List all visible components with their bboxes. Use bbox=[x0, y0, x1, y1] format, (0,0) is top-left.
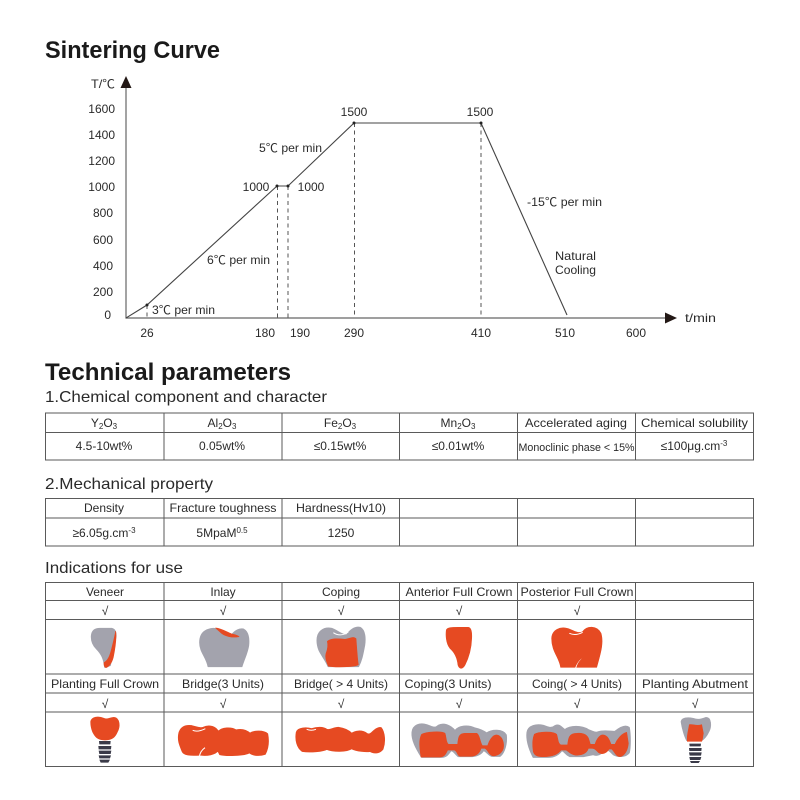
table: chemical component: Chemical solubility bbox=[641, 416, 748, 430]
row labels: Coping bbox=[322, 585, 360, 599]
heading: indications for use: Indications for use bbox=[45, 560, 183, 577]
x axis labels bbox=[140, 311, 716, 340]
x axis labels: 180 bbox=[255, 326, 275, 340]
row labels: Planting Abutment bbox=[642, 677, 749, 691]
table: chemical component bbox=[45, 413, 754, 460]
curve annotations: 5℃ per min bbox=[259, 141, 322, 155]
row labels: Bridge(3 Units) bbox=[182, 677, 264, 691]
row labels: Planting Full Crown bbox=[51, 677, 159, 691]
curve annotations: 1000 bbox=[298, 180, 325, 194]
table: mechanical property bbox=[45, 498, 754, 546]
y axis labels: 1400 bbox=[88, 128, 115, 142]
table: chemical component: O bbox=[342, 416, 352, 430]
row labels: √ bbox=[338, 604, 345, 618]
y axis labels: 1000 bbox=[88, 180, 115, 194]
row labels: √ bbox=[102, 697, 109, 711]
x axis labels: 290 bbox=[344, 326, 364, 340]
row labels: Inlay bbox=[210, 585, 236, 599]
table: mechanical property: 5MpaM bbox=[196, 526, 236, 540]
y axis labels: T/℃ bbox=[91, 77, 115, 91]
table: chemical component: Al bbox=[208, 416, 218, 430]
table: chemical component: O bbox=[462, 416, 471, 430]
row labels: √ bbox=[220, 697, 227, 711]
curve annotations: 3℃ per min bbox=[152, 303, 215, 317]
y axis labels: 1200 bbox=[88, 154, 115, 168]
temperature curve bbox=[126, 122, 567, 318]
row labels: Veneer bbox=[86, 585, 124, 599]
row labels: √ bbox=[456, 604, 463, 618]
table: chemical component: 2 bbox=[338, 422, 343, 431]
y axis labels: 800 bbox=[93, 206, 113, 220]
table: mechanical property: 0.5 bbox=[236, 526, 248, 535]
guide lines bbox=[147, 123, 481, 318]
curve annotations: 1000 bbox=[243, 180, 270, 194]
table: indications for use bbox=[45, 582, 754, 767]
icon: posterior crown bbox=[552, 627, 602, 667]
table: chemical component: Y bbox=[91, 416, 99, 430]
curve annotations bbox=[152, 105, 602, 317]
table: mechanical property: Hardness(Hv10) bbox=[296, 501, 386, 515]
y axis labels: 200 bbox=[93, 285, 113, 299]
table: mechanical property: ≥6.05g.cm bbox=[72, 526, 128, 540]
axes bbox=[120, 76, 677, 324]
y axis labels: 1600 bbox=[88, 102, 115, 116]
table: chemical component: 4.5-10wt% bbox=[76, 439, 133, 453]
icon: bridge 4 units bbox=[296, 728, 384, 753]
table: chemical component: O bbox=[103, 416, 113, 430]
table: chemical component: Fe bbox=[324, 416, 338, 430]
curve annotations: -15℃ per min bbox=[527, 195, 602, 209]
table: chemical component: Accelerated aging bbox=[525, 416, 627, 430]
x axis labels: 26 bbox=[140, 326, 154, 340]
x axis labels: 190 bbox=[290, 326, 310, 340]
icon: anterior crown bbox=[446, 627, 472, 668]
table: chemical component: 3 bbox=[232, 422, 237, 431]
icon: inlay tooth bbox=[200, 628, 249, 666]
row labels: √ bbox=[574, 604, 581, 618]
curve annotations: Cooling bbox=[555, 263, 596, 277]
icon: planting abutment bbox=[681, 717, 711, 763]
table: chemical component: 2 bbox=[218, 422, 223, 431]
curve annotations: 1500 bbox=[467, 105, 494, 119]
line chart: sintering curve bbox=[88, 76, 716, 340]
table: chemical component: Monoclinic phase < 15% bbox=[518, 442, 635, 454]
table: chemical component: -3 bbox=[720, 439, 728, 448]
heading: mechanical property: 2.Mechanical property bbox=[45, 476, 213, 493]
table: mechanical property: Density bbox=[84, 501, 124, 515]
icon: coping 3 units bbox=[412, 724, 506, 757]
x axis labels: 510 bbox=[555, 326, 575, 340]
icon: veneer tooth bbox=[92, 629, 116, 668]
table: chemical component: O bbox=[223, 416, 232, 430]
icon: coping 4 units bbox=[527, 725, 630, 757]
y axis labels bbox=[88, 77, 115, 322]
icon: bridge 3 units bbox=[179, 726, 268, 757]
icon: coping tooth bbox=[317, 628, 365, 667]
row labels: √ bbox=[574, 697, 581, 711]
table: mechanical property: Fracture toughness bbox=[170, 501, 276, 515]
icon: planting full crown bbox=[91, 717, 119, 763]
row labels: Coing( > 4 Units) bbox=[532, 677, 622, 691]
row labels: √ bbox=[692, 697, 699, 711]
table: chemical component: 2 bbox=[457, 422, 462, 431]
heading: Technical parameters: Technical parameters bbox=[45, 359, 291, 386]
row labels bbox=[51, 585, 749, 711]
y axis labels: 0 bbox=[104, 308, 111, 322]
row labels: √ bbox=[220, 604, 227, 618]
row labels: Posterior Full Crown bbox=[520, 585, 634, 599]
row labels: √ bbox=[456, 697, 463, 711]
table: chemical component: 3 bbox=[352, 422, 357, 431]
row labels: Coping(3 Units) bbox=[404, 677, 492, 691]
table: mechanical property: -3 bbox=[128, 526, 136, 535]
table: chemical component: 3 bbox=[471, 422, 476, 431]
title: Sintering Curve: Sintering Curve bbox=[45, 37, 220, 64]
curve annotations: 6℃ per min bbox=[207, 253, 270, 267]
table: chemical component: 2 bbox=[99, 422, 104, 431]
table: chemical component: ≤0.15wt% bbox=[314, 439, 367, 453]
row labels: √ bbox=[102, 604, 109, 618]
row labels: √ bbox=[338, 697, 345, 711]
x axis labels: t/min bbox=[685, 311, 716, 325]
row labels: Bridge( > 4 Units) bbox=[294, 677, 388, 691]
table: chemical component: 3 bbox=[113, 422, 118, 431]
heading: chemical component: 1.Chemical component and character bbox=[45, 389, 328, 406]
curve annotations: 1500 bbox=[341, 105, 368, 119]
row labels: Anterior Full Crown bbox=[406, 585, 512, 599]
table: chemical component: ≤0.01wt% bbox=[432, 439, 485, 453]
y axis labels: 400 bbox=[93, 259, 113, 273]
x axis labels: 600 bbox=[626, 326, 646, 340]
table: mechanical property: 1250 bbox=[328, 526, 355, 540]
curve annotations: Natural bbox=[555, 249, 596, 263]
table: chemical component: ≤100μg.cm bbox=[661, 439, 720, 453]
table: chemical component: Mn bbox=[441, 416, 457, 430]
y axis labels: 600 bbox=[93, 233, 113, 247]
table: chemical component: 0.05wt% bbox=[199, 439, 245, 453]
x axis labels: 410 bbox=[471, 326, 491, 340]
